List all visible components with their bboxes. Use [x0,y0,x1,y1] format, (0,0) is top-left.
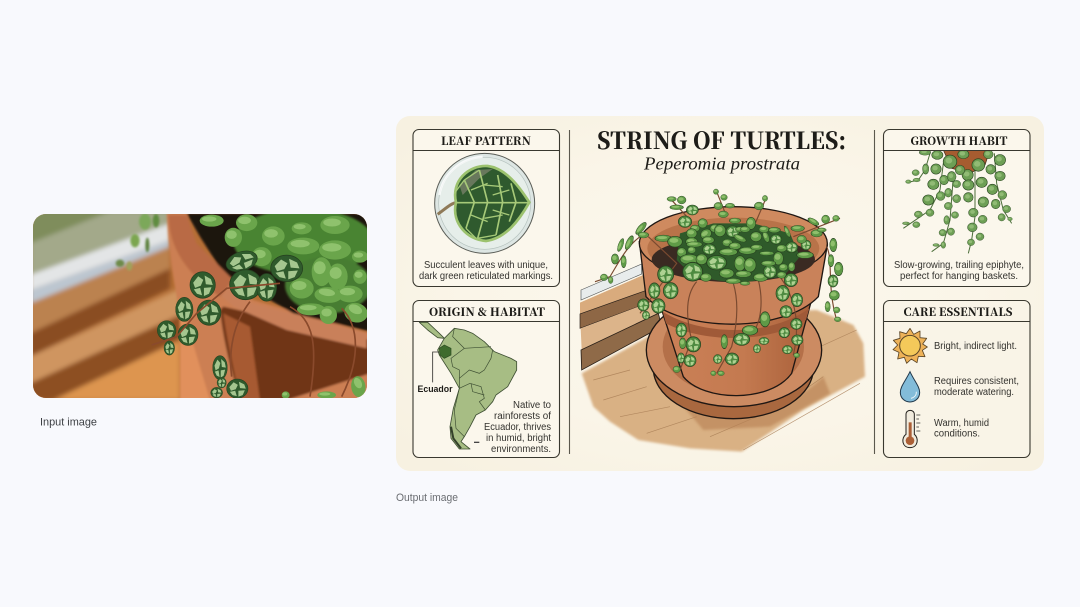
pot body [661,303,811,396]
text: light: Bright, indirect light. [934,341,1017,352]
heading: growth habit: GROWTH HABIT [910,133,1008,149]
heading: leaf pattern: LEAF PATTERN [441,133,532,149]
caption: input image: Input image [40,416,97,428]
panel: growth habit [884,130,1030,286]
foliage inside pot [655,202,822,287]
text: habitat description: rainforests of [494,411,551,422]
text: watering: moderate watering. [934,387,1014,398]
heading: origin and habitat: ORIGIN & HABITAT [429,304,545,320]
text: leaf description: dark green reticulated markings. [419,271,553,282]
icon: magnified leaf [435,153,535,253]
background leaves [200,214,372,401]
input photo: plant in terracotta pot [30,208,373,401]
label: Ecuador: Ecuador [418,384,453,395]
panel: leaf pattern [413,130,560,286]
pot rim [639,242,827,324]
trailing leaves [600,189,843,376]
illustration: potted plant on windowsill [580,189,865,452]
panel: origin and habitat [413,300,560,458]
icon: water drop [900,372,920,402]
heading: care essentials: CARE ESSENTIALS [904,304,1012,320]
icon: sun [893,328,927,363]
text: temperature: Warm, humid [934,418,989,429]
mottled foreground leaves [157,247,303,398]
text: habitat description: Ecuador, thrives [484,422,551,433]
text: leaf description: Succulent leaves with unique, [424,260,548,271]
column dividers [570,130,874,454]
icon: thermometer [903,410,920,448]
illustration: hanging stems [902,149,1012,253]
blurred sprig at window [116,214,159,271]
windowsill [580,264,662,370]
map: South America [419,322,517,449]
text: growth description: perfect for hanging baskets. [900,271,1018,282]
trailing stems [595,192,840,373]
output infographic card [396,116,1044,471]
text: watering: Requires consistent, [934,376,1019,387]
saucer [646,293,822,419]
panel: care essentials [884,300,1030,458]
title: STRING OF TURTLES: [597,122,846,156]
text: habitat description: environments. [491,444,551,455]
stems [152,283,355,397]
text: temperature: conditions. [934,428,980,440]
text: habitat description: Native to [513,400,551,411]
subtitle: Peperomia prostrata [643,154,800,174]
caption: output image: Output image [396,492,458,504]
text: growth description: Slow-growing, trailing epiphyte, [894,260,1024,271]
wooden table [582,310,865,452]
text: habitat description: in humid, bright [486,433,551,444]
